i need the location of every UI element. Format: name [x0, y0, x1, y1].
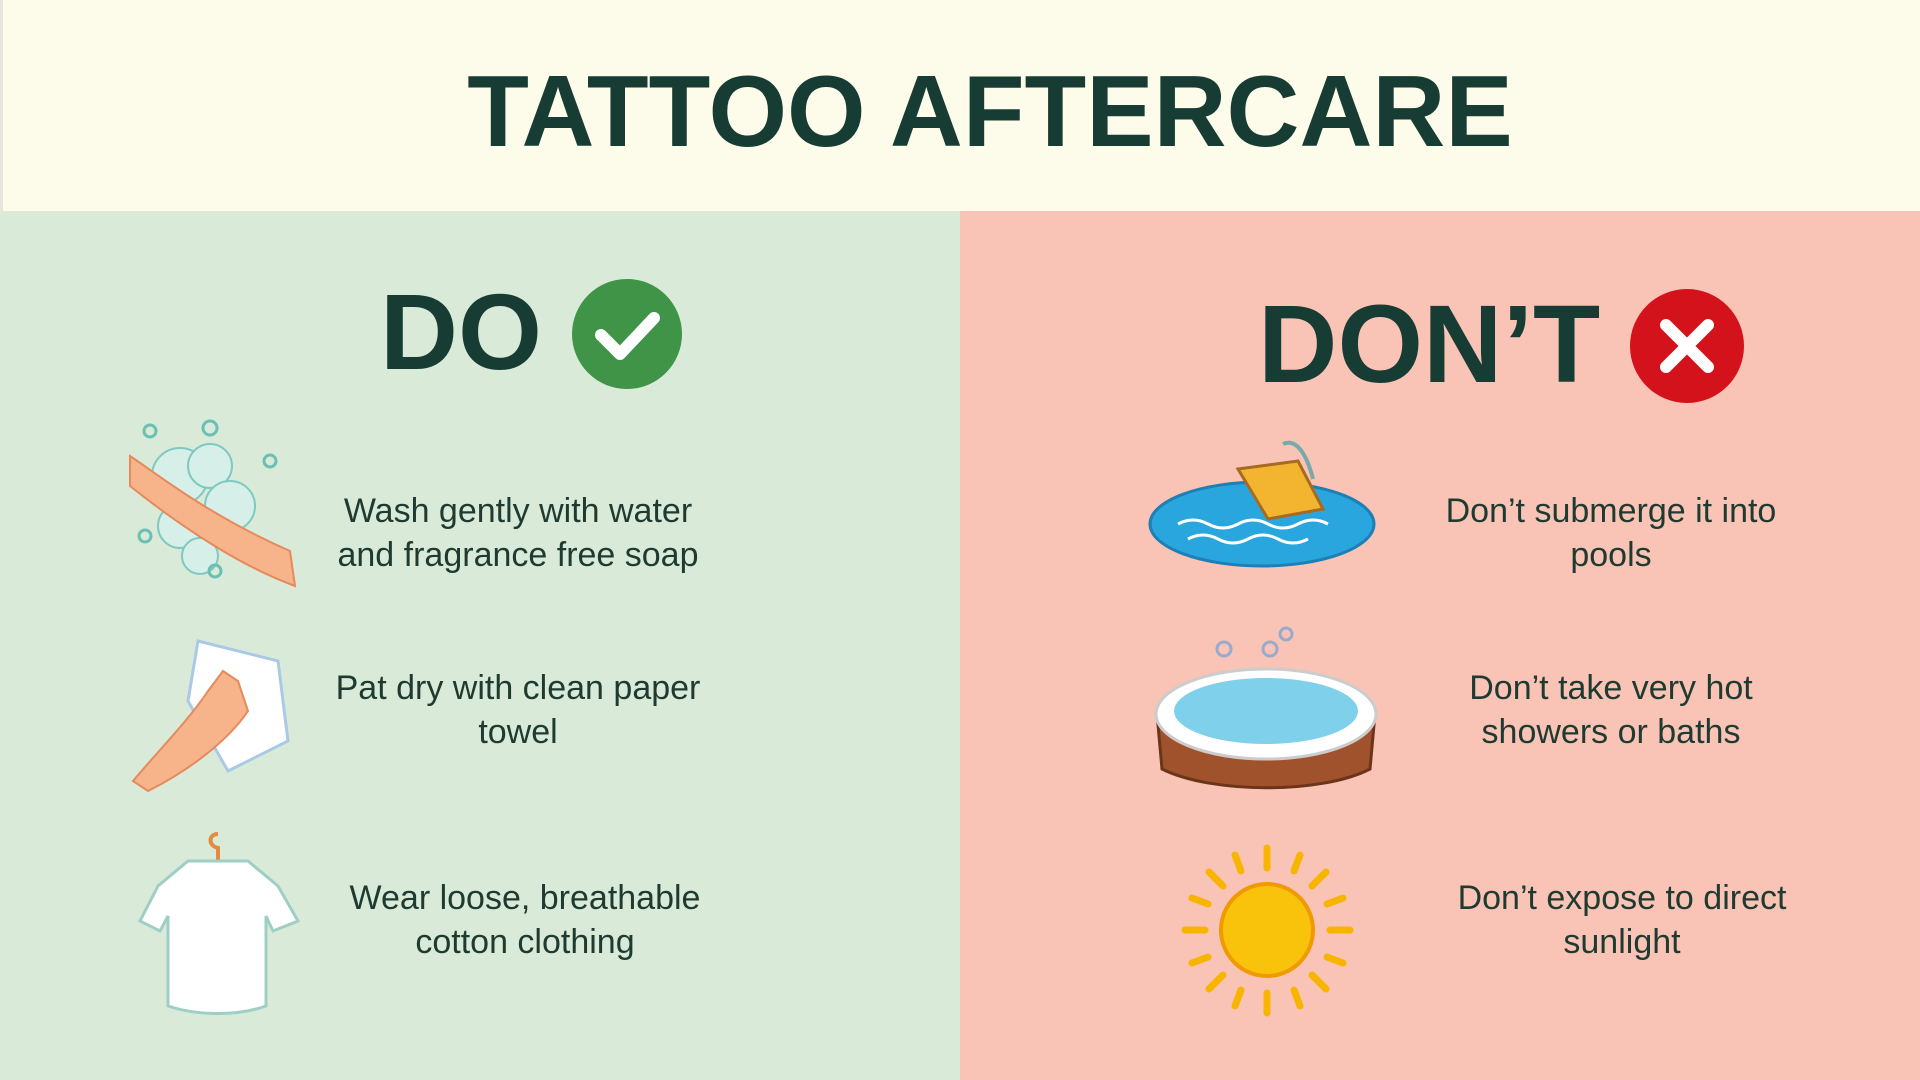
text: pat dry: towel	[478, 713, 558, 751]
text: clothing: cotton clothing	[415, 923, 635, 961]
icon: sun	[1182, 844, 1354, 1016]
text: wash	[337, 492, 699, 574]
title: TATTOO AFTERCARE	[467, 56, 1513, 168]
icon: pool	[1148, 440, 1376, 568]
text: wash: Wash gently with water	[344, 492, 692, 530]
text: pools: Don’t submerge it into	[1446, 492, 1776, 530]
heading: DON'T: DON’T	[1258, 283, 1600, 406]
panel: dont	[960, 211, 1920, 1080]
text: pools: pools	[1570, 536, 1652, 574]
icon: paper towel	[132, 639, 290, 792]
text: hot showers: showers or baths	[1482, 713, 1740, 751]
text: clothing: Wear loose, breathable	[350, 879, 700, 917]
icon: x	[1630, 289, 1744, 403]
text: pat dry: Pat dry with clean paper	[336, 669, 700, 707]
text: sunlight: Don’t expose to direct	[1458, 879, 1786, 917]
header band	[0, 0, 1920, 211]
text: sunlight	[1458, 879, 1786, 961]
icon: washing hands	[129, 420, 296, 588]
text: hot showers	[1469, 669, 1753, 751]
text: wash: and fragrance free soap	[337, 536, 699, 574]
icon: hot tub	[1154, 626, 1378, 790]
text: sunlight: sunlight	[1563, 923, 1681, 961]
text: hot showers: Don’t take very hot	[1469, 669, 1753, 707]
text: pools	[1446, 492, 1776, 574]
text: clothing	[350, 879, 700, 961]
icon: check	[572, 279, 682, 389]
icon: t-shirt	[138, 832, 300, 1015]
panel: do	[0, 211, 960, 1080]
heading: DO: DO	[380, 271, 542, 392]
text: pat dry	[336, 669, 700, 751]
